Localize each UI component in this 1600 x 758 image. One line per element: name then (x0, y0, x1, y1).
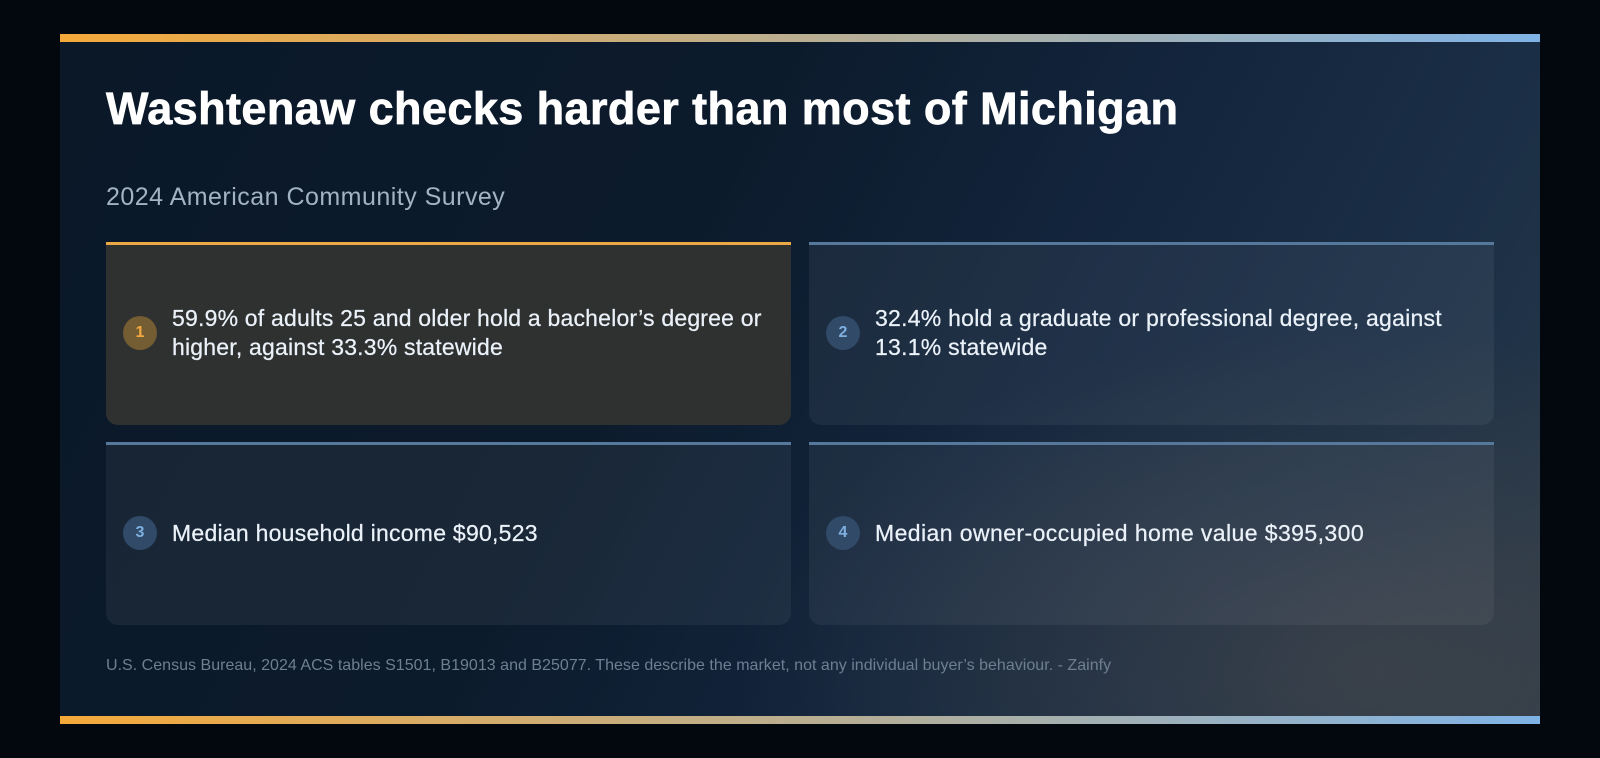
badge 1 (123, 316, 157, 350)
badge 4 (826, 516, 860, 550)
panel: fact 2 (809, 242, 1494, 424)
badge 4: 4 (839, 524, 847, 541)
fact 2 text (875, 305, 1442, 360)
fact 2 text: 13.1% statewide (875, 334, 1048, 360)
panel: fact 4 (809, 442, 1494, 624)
fact 3 text: Median household income $90,523 (172, 520, 538, 546)
fact 4 text: Median owner-occupied home value $395,300 (875, 520, 1364, 546)
top gradient bar (60, 34, 1540, 42)
fact 2 text: 32.4% hold a graduate or professional degree, against (875, 305, 1442, 331)
subtitle: 2024 American Community Survey (106, 183, 505, 211)
fact 1 text: 59.9% of adults 25 and older hold a bachelor’s degree or (172, 305, 762, 331)
panel: fact 1 (106, 242, 791, 424)
badge 2 (826, 316, 860, 350)
badge 1: 1 (136, 324, 144, 341)
fact 1 text: higher, against 33.3% statewide (172, 334, 503, 360)
bottom gradient bar (60, 716, 1540, 724)
badge 2: 2 (839, 324, 847, 341)
source note: U.S. Census Bureau, 2024 ACS tables S1501, B19013 and B25077. These describe the market, not any individual buyer’s behaviour. - Zainfy (106, 657, 1111, 674)
panel: fact 3 (106, 442, 791, 624)
fact 1 text (172, 305, 762, 360)
title: Washtenaw checks harder than most of Michigan (106, 83, 1178, 134)
badge 3: 3 (136, 524, 144, 541)
badge 3 (123, 516, 157, 550)
